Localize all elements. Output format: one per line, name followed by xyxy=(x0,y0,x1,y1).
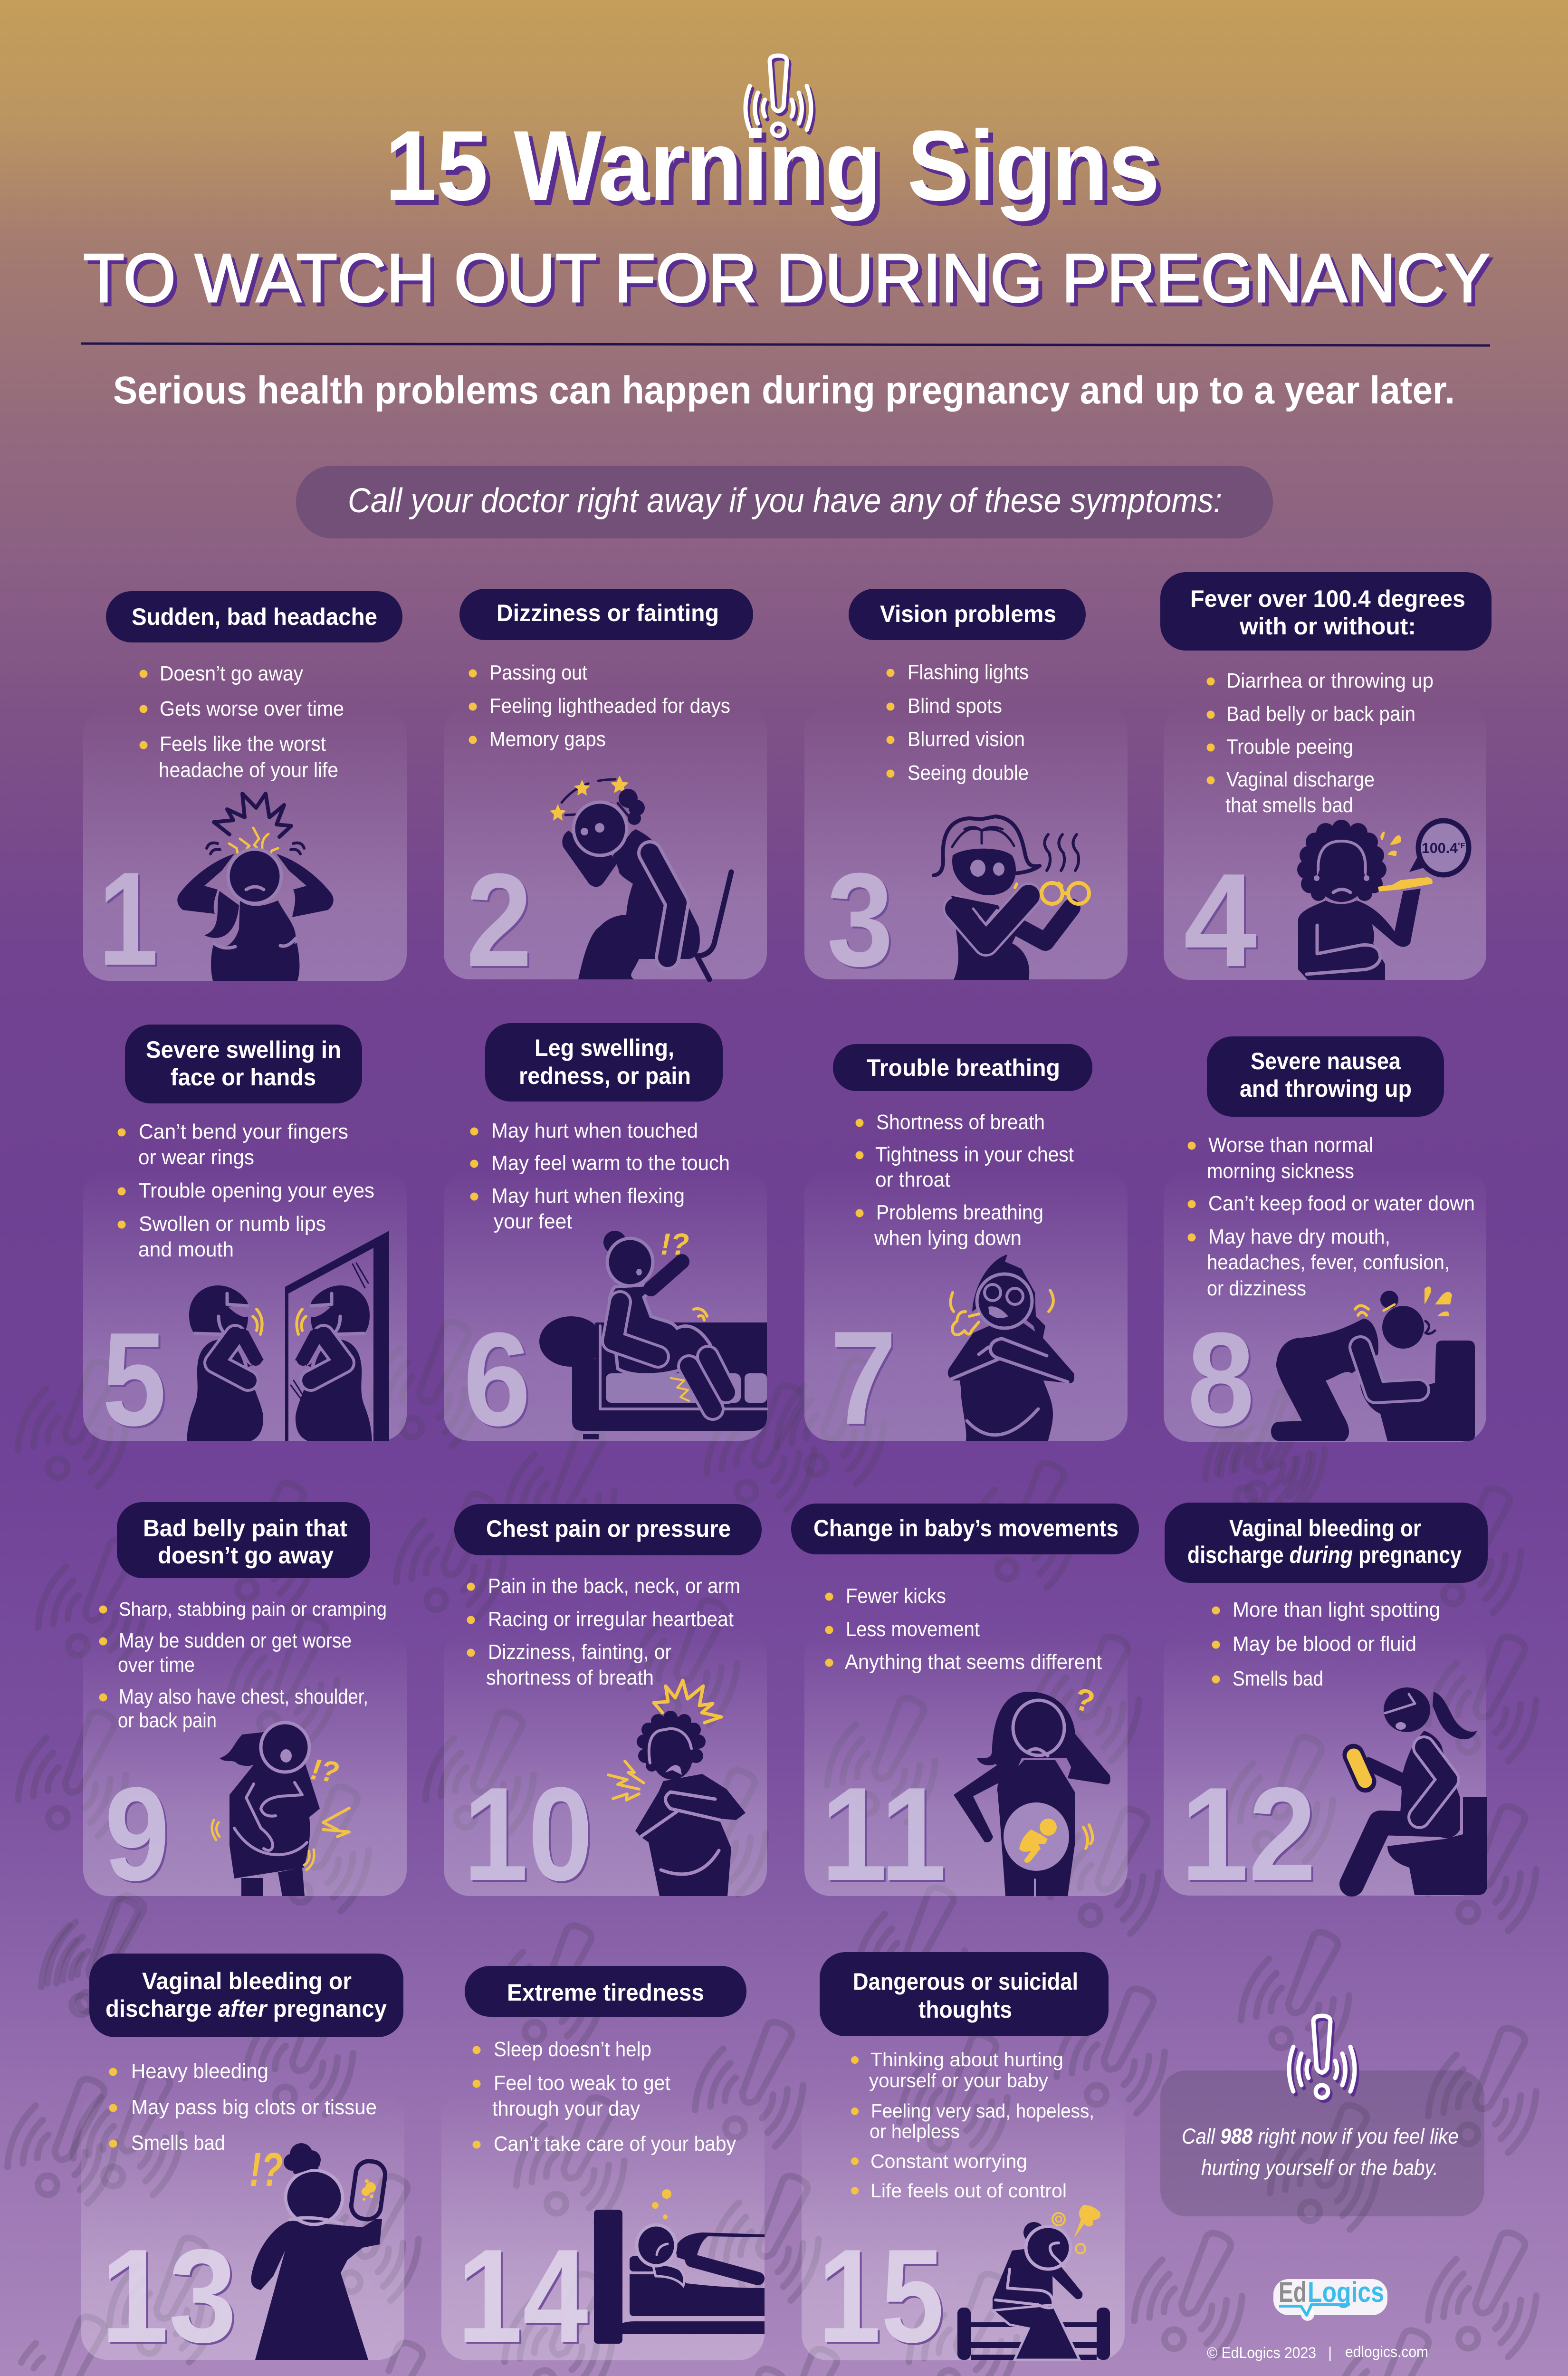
number 3: 3 xyxy=(829,848,895,996)
heading: Vaginal bleeding or xyxy=(1229,1515,1421,1542)
symptoms list: Memory gaps xyxy=(489,728,606,751)
illustration: woman sitting on bed xyxy=(957,2205,1110,2360)
symptoms list: Less movement xyxy=(846,1618,980,1641)
panel 3: vision xyxy=(804,589,1128,996)
symptoms list: May hurt when flexing xyxy=(491,1184,685,1207)
number 3: 3 xyxy=(827,846,893,994)
symptoms list: Trouble opening your eyes xyxy=(139,1179,374,1202)
illustration: woman on couch: !? xyxy=(660,1227,689,1261)
title: 15 Warning Signs xyxy=(385,110,1160,221)
number 1: 1 xyxy=(100,847,160,995)
symptoms list: Pain in the back, neck, or arm xyxy=(488,1574,740,1598)
heading: Severe nausea xyxy=(1251,1048,1401,1074)
heading: Trouble breathing xyxy=(867,1054,1060,1081)
symptoms list: through your day xyxy=(492,2097,640,2120)
illustration: woman on couch xyxy=(539,1227,767,1439)
symptoms list xyxy=(470,1119,730,1233)
number 15: 15 xyxy=(820,2224,946,2372)
number 13: 13 xyxy=(103,2224,239,2372)
panel card xyxy=(804,1630,1128,1896)
subtitle: TO WATCH OUT FOR DURING PREGNANCY xyxy=(87,243,1494,320)
panel card xyxy=(804,1169,1128,1441)
panel 14: tiredness xyxy=(441,1966,765,2372)
symptoms list: Flashing lights xyxy=(908,661,1029,684)
heading: Severe swelling in xyxy=(146,1036,341,1063)
number 12: 12 xyxy=(1183,1762,1318,1910)
symptoms list: May be blood or fluid xyxy=(1233,1632,1416,1656)
heading: thoughts xyxy=(918,1996,1012,2023)
number 9: 9 xyxy=(106,1762,172,1910)
symptoms list: Blurred vision xyxy=(908,728,1025,751)
heading: discharge during pregnancy xyxy=(1187,1542,1462,1568)
heading: and throwing up xyxy=(1240,1075,1412,1102)
panel card xyxy=(1164,1630,1486,1896)
symptoms list: over time xyxy=(118,1653,195,1677)
panel 13: bleeding after xyxy=(81,1954,404,2372)
number 14: 14 xyxy=(457,2222,589,2370)
symptoms list: when lying down xyxy=(874,1226,1022,1250)
symptoms list xyxy=(1212,1598,1440,1690)
number 5: 5 xyxy=(102,1305,166,1454)
heading: Extreme tiredness xyxy=(507,1979,704,2006)
symptoms list xyxy=(1207,669,1434,817)
panel card xyxy=(804,706,1128,979)
symptoms list: Sleep doesn’t help xyxy=(494,2038,651,2061)
symptoms list xyxy=(109,2060,377,2155)
symptoms list: Blind spots xyxy=(908,694,1002,718)
symptoms list xyxy=(99,1598,387,1732)
heading xyxy=(1207,1036,1444,1117)
illustration: woman with fever: °F xyxy=(1458,842,1465,850)
illustration: woman with headache xyxy=(177,794,334,981)
symptoms list: Problems breathing xyxy=(876,1201,1043,1224)
symptoms list: yourself or your baby xyxy=(869,2069,1048,2091)
callout: call 988: Call 988 right now if you feel like xyxy=(1182,2124,1459,2148)
symptoms list xyxy=(472,2038,736,2156)
number 4: 4 xyxy=(1186,848,1260,996)
symptoms list: Can’t bend your fingers xyxy=(139,1120,348,1143)
logo: EdLogics xyxy=(1273,2276,1387,2321)
symptoms list: Sharp, stabbing pain or cramping xyxy=(119,1598,387,1620)
heading: Vision problems xyxy=(880,601,1056,627)
panel card xyxy=(83,1169,407,1441)
number 9: 9 xyxy=(105,1760,170,1908)
number 2: 2 xyxy=(466,846,532,995)
illustration: woman short of breath xyxy=(948,1255,1074,1441)
number 7: 7 xyxy=(830,1304,897,1452)
illustration: woman in bed xyxy=(594,2189,765,2344)
symptoms list: Smells bad xyxy=(131,2131,225,2155)
heading xyxy=(117,1502,370,1578)
heading: redness, or pain xyxy=(519,1063,691,1089)
symptoms list xyxy=(467,1574,740,1689)
symptoms list: Constant worrying xyxy=(870,2150,1027,2172)
heading: Bad belly pain that xyxy=(143,1515,347,1542)
heading xyxy=(89,1954,403,2037)
footer credit: edlogics.com xyxy=(1345,2343,1428,2360)
illustration: woman with pad on toilet xyxy=(1339,1687,1487,1895)
panel card xyxy=(83,1630,407,1896)
symptoms list xyxy=(1188,1133,1475,1300)
symptoms list: headaches, fever, confusion, xyxy=(1207,1251,1450,1274)
panel 1: headache xyxy=(83,591,407,995)
illustration: woman with chest pain xyxy=(608,1680,746,1896)
background watermark pattern xyxy=(0,1303,1562,2376)
illustration: woman holding belly: !? xyxy=(309,1753,341,1789)
symptoms list: Bad belly or back pain xyxy=(1226,702,1415,726)
number 13: 13 xyxy=(101,2222,237,2370)
heading: discharge after pregnancy xyxy=(105,1995,387,2022)
symptoms list: your feet xyxy=(494,1210,572,1233)
symptoms list: May have dry mouth, xyxy=(1208,1225,1390,1248)
heading xyxy=(849,589,1086,640)
symptoms list: Anything that seems different xyxy=(845,1650,1102,1674)
symptoms list: morning sickness xyxy=(1207,1159,1354,1183)
callout: call 988 xyxy=(1160,2070,1484,2216)
illustration: woman holding belly xyxy=(212,1723,349,1896)
symptoms list: Feeling lightheaded for days xyxy=(489,694,730,718)
panel card xyxy=(1164,1169,1486,1442)
panel card xyxy=(1164,706,1486,980)
panel 11: baby movements xyxy=(791,1504,1139,1910)
panel card xyxy=(444,706,767,979)
panel 2: dizziness xyxy=(444,589,767,996)
symptoms list: May be sudden or get worse xyxy=(119,1629,352,1652)
symptoms list: Can’t keep food or water down xyxy=(1208,1192,1475,1215)
symptoms list: Shortness of breath xyxy=(876,1111,1045,1134)
panel card xyxy=(83,708,407,981)
heading xyxy=(125,1025,362,1103)
panel card xyxy=(802,2091,1125,2360)
panel 6: leg xyxy=(444,1023,767,1456)
symptoms list: Trouble peeing xyxy=(1226,735,1353,758)
number 6: 6 xyxy=(463,1305,531,1454)
symptoms list xyxy=(825,1584,1102,1674)
panel 7: breathing xyxy=(804,1044,1128,1454)
panel 15: suicidal thoughts xyxy=(802,1952,1125,2372)
symptoms list: headache of your life xyxy=(159,758,338,782)
symptoms list xyxy=(468,661,730,751)
heading: with or without: xyxy=(1239,613,1416,640)
number 12: 12 xyxy=(1181,1760,1316,1908)
symptoms list xyxy=(118,1120,374,1261)
symptoms list: Worse than normal xyxy=(1208,1133,1373,1157)
illustration: pregnant woman with baby xyxy=(954,1681,1110,1896)
number 14: 14 xyxy=(459,2224,591,2372)
number 2: 2 xyxy=(468,848,534,996)
heading: Leg swelling, xyxy=(535,1035,674,1061)
callout: call 988: hurting yourself or the baby. xyxy=(1201,2156,1438,2180)
number 10: 10 xyxy=(465,1762,595,1910)
heading: face or hands xyxy=(171,1064,316,1091)
symptoms list: Swollen or numb lips xyxy=(139,1212,326,1236)
number 15: 15 xyxy=(818,2222,944,2370)
symptoms list: Thinking about hurting xyxy=(870,2049,1063,2070)
symptoms list: Dizziness, fainting, or xyxy=(488,1640,671,1664)
symptoms list: Vaginal discharge xyxy=(1226,768,1375,791)
symptoms list: or back pain xyxy=(118,1709,217,1732)
panel card xyxy=(81,2091,404,2360)
number 10: 10 xyxy=(463,1760,593,1908)
symptoms list: or wear rings xyxy=(138,1146,254,1169)
panel 5: swelling xyxy=(83,1025,407,1456)
symptoms list: More than light spotting xyxy=(1233,1598,1440,1621)
symptoms list xyxy=(140,662,344,782)
symptoms list: May also have chest, shoulder, xyxy=(119,1685,368,1708)
heading xyxy=(833,1044,1092,1091)
heading xyxy=(1160,572,1492,651)
illustration: woman with blurred vision xyxy=(934,816,1089,980)
panel 8: nausea xyxy=(1164,1036,1486,1456)
symptoms list: shortness of breath xyxy=(486,1666,654,1689)
heading: Dangerous or suicidal xyxy=(853,1968,1078,1995)
heading xyxy=(791,1504,1139,1554)
symptoms list: or throat xyxy=(875,1168,950,1191)
heading xyxy=(820,1952,1109,2036)
number 6: 6 xyxy=(465,1307,533,1456)
symptoms list: Smells bad xyxy=(1233,1667,1323,1690)
title: 15 Warning Signs xyxy=(390,115,1165,226)
heading: Change in baby’s movements xyxy=(813,1515,1119,1542)
heading xyxy=(454,1504,762,1555)
icon: callout alert xyxy=(1289,2016,1357,2101)
symptoms list: Feel too weak to get xyxy=(494,2071,670,2095)
panel 10: chest xyxy=(444,1504,767,1910)
footer credit: | xyxy=(1328,2344,1332,2361)
symptoms list: Life feels out of control xyxy=(870,2180,1067,2202)
symptoms list: Can’t take care of your baby xyxy=(494,2132,736,2156)
symptoms list xyxy=(855,1111,1074,1250)
symptoms list: May hurt when touched xyxy=(491,1119,698,1142)
panel 12: bleeding during xyxy=(1164,1503,1488,1910)
panel card xyxy=(444,1169,767,1441)
illustration: woman holding pad: !? xyxy=(249,2143,283,2196)
illustration: fainting woman on chair xyxy=(550,776,731,979)
heading: Vaginal bleeding or xyxy=(142,1968,352,1994)
footer credit xyxy=(1207,2343,1428,2361)
divider xyxy=(81,344,1490,345)
symptoms list: Doesn’t go away xyxy=(160,662,303,685)
heading xyxy=(459,589,753,640)
heading: doesn’t go away xyxy=(158,1542,334,1569)
illustration: pregnant woman with baby: ? xyxy=(1071,1681,1099,1720)
illustration: woman with fever xyxy=(1297,820,1469,980)
heading xyxy=(106,591,402,642)
call to action pill: Call your doctor right away if you have any of these symptoms: xyxy=(348,482,1222,520)
symptoms list: that smells bad xyxy=(1225,794,1353,817)
symptoms list: and mouth xyxy=(138,1238,234,1261)
panel 4: fever xyxy=(1160,572,1492,996)
number 4: 4 xyxy=(1184,846,1258,995)
symptoms list: Tightness in your chest xyxy=(875,1143,1074,1166)
illustration: woman with fever: 100.4 xyxy=(1422,840,1458,856)
subtitle: TO WATCH OUT FOR DURING PREGNANCY xyxy=(83,240,1490,316)
heading xyxy=(1165,1503,1488,1583)
panel 9: belly pain xyxy=(83,1502,407,1910)
heading: Sudden, bad headache xyxy=(132,604,377,630)
number 5: 5 xyxy=(104,1307,168,1456)
symptoms list: or dizziness xyxy=(1207,1277,1306,1300)
symptoms list: Passing out xyxy=(489,661,587,684)
number 8: 8 xyxy=(1187,1305,1254,1454)
symptoms list: Gets worse over time xyxy=(160,697,344,720)
call to action pill xyxy=(296,466,1273,538)
illustration: woman looking in mirror xyxy=(187,1231,389,1441)
symptoms list: Heavy bleeding xyxy=(131,2060,268,2083)
panel card xyxy=(444,1630,767,1896)
symptoms list xyxy=(851,2049,1094,2202)
number 1: 1 xyxy=(98,845,158,993)
symptoms list: Seeing double xyxy=(908,761,1029,785)
intro text: Serious health problems can happen during pregnancy and up to a year later. xyxy=(113,369,1455,412)
heading xyxy=(485,1023,723,1102)
symptoms list: or helpless xyxy=(870,2120,960,2142)
heading: Chest pain or pressure xyxy=(486,1515,731,1542)
footer credit: © EdLogics 2023 xyxy=(1207,2344,1316,2361)
panel card xyxy=(441,2091,765,2360)
symptoms list: Fewer kicks xyxy=(846,1584,946,1608)
heading: Fever over 100.4 degrees xyxy=(1190,585,1465,612)
number 11: 11 xyxy=(821,1760,947,1908)
symptoms list: Diarrhea or throwing up xyxy=(1226,669,1434,692)
number 8: 8 xyxy=(1189,1307,1256,1456)
heading xyxy=(465,1966,746,2017)
illustration: woman vomiting in toilet xyxy=(1271,1286,1475,1441)
number 7: 7 xyxy=(832,1306,899,1454)
heading: Dizziness or fainting xyxy=(497,600,719,626)
symptoms list: Racing or irregular heartbeat xyxy=(488,1608,734,1631)
logo: EdLogics: Logics xyxy=(1308,2276,1384,2308)
symptoms list xyxy=(887,661,1029,785)
symptoms list: Feels like the worst xyxy=(160,732,326,756)
symptoms list: Feeling very sad, hopeless, xyxy=(871,2100,1094,2122)
symptoms list: May feel warm to the touch xyxy=(491,1151,730,1175)
icon: title alert xyxy=(746,56,813,139)
illustration: woman holding pad xyxy=(249,2143,387,2360)
number 11: 11 xyxy=(823,1762,948,1910)
symptoms list: May pass big clots or tissue xyxy=(131,2096,377,2119)
logo: EdLogics: Ed xyxy=(1279,2276,1307,2308)
